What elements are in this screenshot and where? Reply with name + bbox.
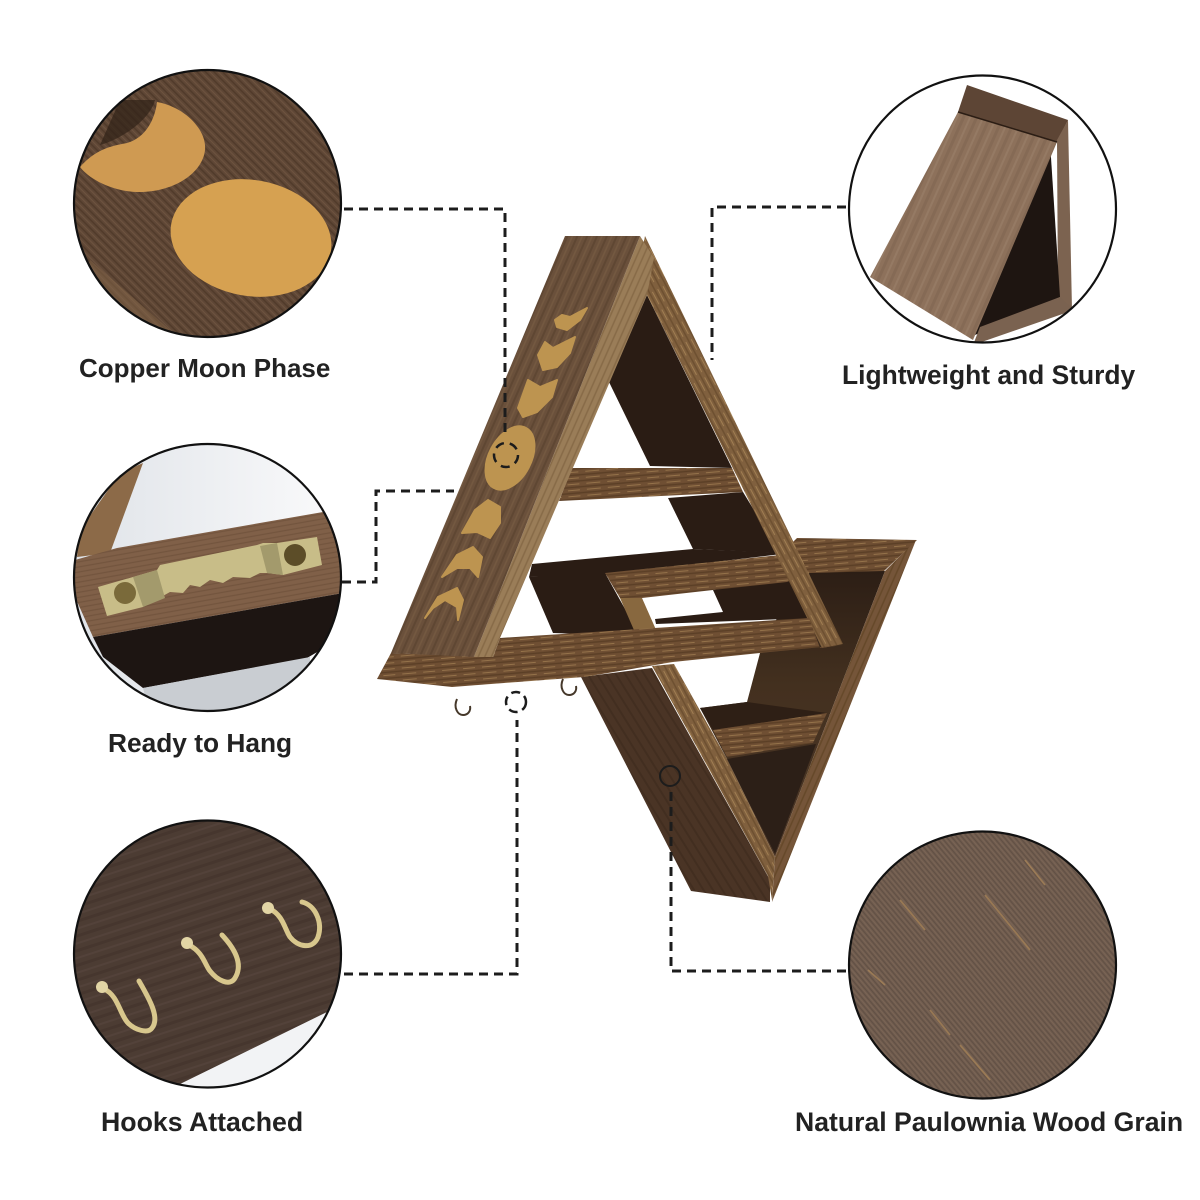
lower triangle top rail <box>605 538 917 598</box>
upper triangle back panels <box>529 295 812 636</box>
icon: lightweight and sturdy detail circle <box>845 70 1125 350</box>
bottom rail <box>377 618 843 687</box>
left light edge <box>474 236 654 657</box>
label: copper moon phase: Copper Moon Phase <box>79 353 330 383</box>
icon: hooks detail circle <box>70 815 350 1097</box>
label: lightweight and sturdy: Lightweight and Sturdy <box>842 360 1135 390</box>
icon: copper moon phase detail circle <box>70 65 350 345</box>
dashed connector: wood grain <box>671 786 846 971</box>
small divider <box>620 598 657 637</box>
product: triangular moon shelf <box>377 236 917 902</box>
dashed connector: lightweight and sturdy <box>712 207 846 360</box>
dashed connector: hooks <box>344 720 517 974</box>
label: hooks attached: Hooks Attached <box>101 1107 303 1137</box>
left face with moons <box>391 236 640 657</box>
marker: moon phase <box>494 443 518 467</box>
lower inverted triangle <box>581 540 916 902</box>
upper shelf <box>559 468 743 501</box>
dashed connector: ready to hang <box>342 491 454 582</box>
upper triangle right strip <box>640 236 843 648</box>
moon phases <box>425 308 587 620</box>
label: ready to hang: Ready to Hang <box>108 728 292 758</box>
sawtooth hanger <box>98 537 322 616</box>
icon: ready to hang detail circle <box>70 440 350 720</box>
icon: wood grain detail circle <box>845 828 1121 1104</box>
hooks <box>456 679 576 715</box>
marker: hook <box>506 692 526 712</box>
marker: wood grain <box>660 766 680 786</box>
label: natural paulownia wood grain: Natural Paulownia Wood Grain <box>795 1107 1183 1137</box>
dashed connector: copper moon phase <box>344 209 505 436</box>
